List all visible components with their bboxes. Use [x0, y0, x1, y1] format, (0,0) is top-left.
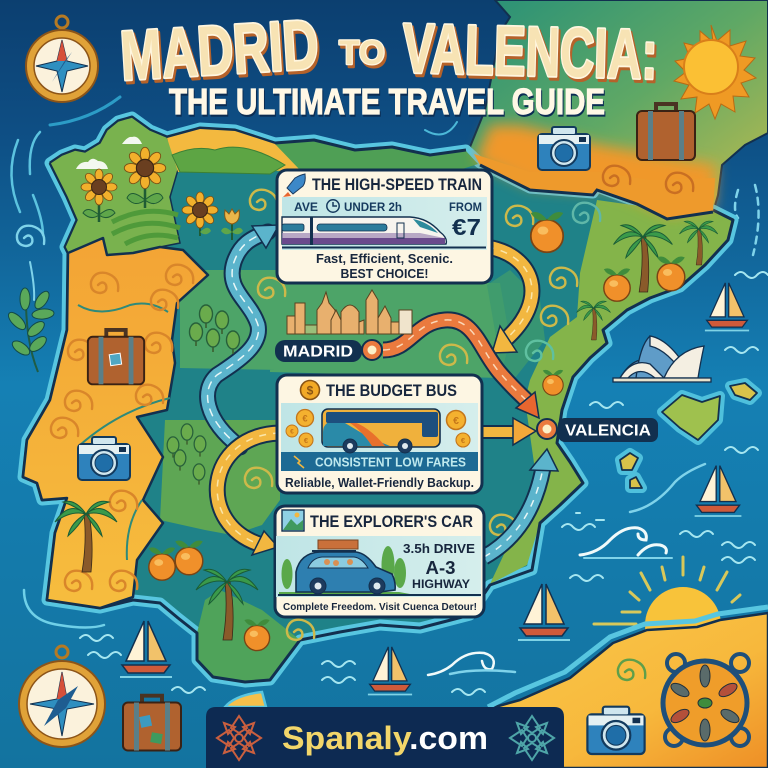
footer ornament right [510, 716, 554, 760]
icon: orange south [244, 619, 270, 651]
icon: palm south [196, 569, 258, 640]
card: the explorer's car [275, 506, 484, 617]
icon: sunflower one [81, 169, 117, 222]
best choice: BEST CHOICE! [340, 266, 428, 281]
region: orange north-east glow [476, 125, 716, 215]
title: main heading: MADRID [118, 5, 321, 95]
icon: camera bottom [587, 707, 645, 754]
region: eastern lime strip [490, 200, 733, 584]
icon: oranges east [531, 212, 685, 395]
icon: palm east three [576, 301, 611, 340]
Balearic islands [620, 383, 757, 488]
price label: FROM [449, 200, 482, 214]
region: north-east green [487, 270, 545, 378]
label: Valencia [558, 418, 658, 442]
Portugal border line [78, 304, 170, 560]
ground line [278, 594, 481, 596]
icon: sunflower two [124, 147, 166, 208]
card: the budget bus [277, 375, 482, 493]
card: the high-speed train [277, 170, 492, 283]
highway label: HIGHWAY [412, 577, 470, 591]
map: orange band edge [480, 165, 713, 219]
icon: shell building [613, 336, 711, 382]
icon: palm Portugal [55, 501, 117, 572]
bus scene panel [281, 403, 478, 471]
sand decoration: swirl [618, 660, 645, 680]
land: small southern coast by footer [225, 692, 266, 707]
land: south-east coast glow [488, 607, 768, 707]
icon: rocket [283, 174, 305, 197]
route: orange main line Madrid to Valencia [383, 320, 539, 418]
icon: sailboat east mid [695, 466, 741, 516]
route: blue path Madrid to train [208, 225, 279, 447]
region: north coast green strip [272, 141, 478, 176]
region: Portugal [23, 238, 208, 608]
icon: Madrid skyline [287, 290, 412, 334]
icon: wave south [428, 653, 515, 675]
label: Valencia: VALENCIA [565, 422, 651, 440]
footer text: Spanaly.com [282, 720, 488, 756]
map: Iberian peninsula [23, 117, 733, 682]
duration: UNDER 2h [344, 200, 402, 214]
icon: compass top left [26, 16, 98, 102]
title: main heading: TO [339, 34, 385, 72]
region: field stripes [112, 211, 180, 244]
region: orange north-east strip [474, 154, 715, 219]
caption: Complete Freedom. Visit Cuenca Detour! [283, 601, 477, 613]
caption: Reliable, Wallet-Friendly Backup. [285, 476, 474, 490]
label: Madrid: MADRID [283, 344, 353, 360]
marker: Valencia [537, 419, 557, 439]
icon: olive branch [6, 288, 54, 372]
region: northern green lands [50, 117, 180, 255]
title: main heading [118, 5, 659, 95]
icon: olive trees [190, 305, 240, 354]
price: €7 [452, 214, 481, 240]
region: northern hills [167, 129, 300, 174]
icon: paella pan [663, 654, 749, 746]
land: south-east coast [495, 613, 768, 768]
icon: sailboat south [518, 584, 570, 640]
footer ornament left [217, 716, 261, 760]
icon: wave right [580, 528, 672, 558]
icon: palm east two [679, 221, 718, 265]
train details: AVE [294, 200, 318, 214]
region: southern tip [197, 590, 300, 682]
low fares strip [281, 452, 478, 471]
icon: camera Portugal [78, 437, 130, 480]
icon: car with luggage [296, 540, 395, 594]
train scene panel [282, 197, 487, 250]
route: car arrow to Valencia [484, 449, 558, 557]
icon: suitcase Portugal [88, 330, 144, 384]
icon: suitcase bottom [123, 696, 181, 751]
icon: sailboat west [120, 621, 172, 677]
icon: dollar coin: $ [307, 384, 314, 398]
card heading: THE EXPLORER'S CAR [310, 513, 473, 531]
icon: train [282, 217, 486, 248]
low fares strip: CONSISTENT LOW FARES [315, 456, 466, 470]
icon: oranges west [149, 541, 203, 580]
marker: Madrid [362, 340, 382, 360]
icon: suitcase top [637, 104, 695, 160]
route: yellow arrow bus to car [217, 433, 280, 555]
subtitle: THE ULTIMATE TRAVEL GUIDE [169, 81, 605, 122]
icon: trees [279, 546, 410, 595]
route: yellow arrow from train [487, 247, 532, 353]
map: France and north-east land [470, 0, 768, 219]
route: bus arrow to Valencia [480, 418, 536, 445]
region: mid-south green [160, 420, 280, 535]
icon: olive grove south [167, 424, 206, 485]
icon: cloud one [76, 159, 108, 169]
icon: clock [327, 200, 339, 212]
icon: sun [674, 25, 756, 119]
icon: sailboat east top [705, 283, 749, 330]
map coast line [23, 117, 733, 682]
icon: tulip [221, 209, 243, 240]
region: central green plateau [180, 270, 510, 378]
icon: bus [322, 409, 440, 453]
caption: Fast, Efficient, Scenic. [316, 251, 453, 266]
sun rising over the sea [594, 557, 740, 663]
icon: landscape picture [282, 510, 304, 531]
icon: camera top [538, 127, 590, 170]
icon: dollar coin [300, 380, 320, 400]
icon: cloud two [122, 137, 142, 144]
card heading: THE BUDGET BUS [326, 382, 457, 400]
drive time: 3.5h DRIVE [403, 541, 475, 556]
icon: sailboat centre [368, 647, 412, 694]
map: decorative swirls [51, 166, 693, 640]
decorative waves and currents [11, 97, 768, 695]
icon: compass bottom left [19, 646, 105, 747]
card heading: THE HIGH-SPEED TRAIN [312, 176, 482, 194]
icon: sunflower three [182, 192, 218, 236]
footer bar [206, 707, 564, 768]
icon: palm east one [614, 225, 672, 292]
label: Madrid [275, 340, 362, 362]
icons: euro coins [286, 410, 470, 447]
car scene panel [276, 536, 481, 597]
road name: A-3 [426, 558, 456, 578]
